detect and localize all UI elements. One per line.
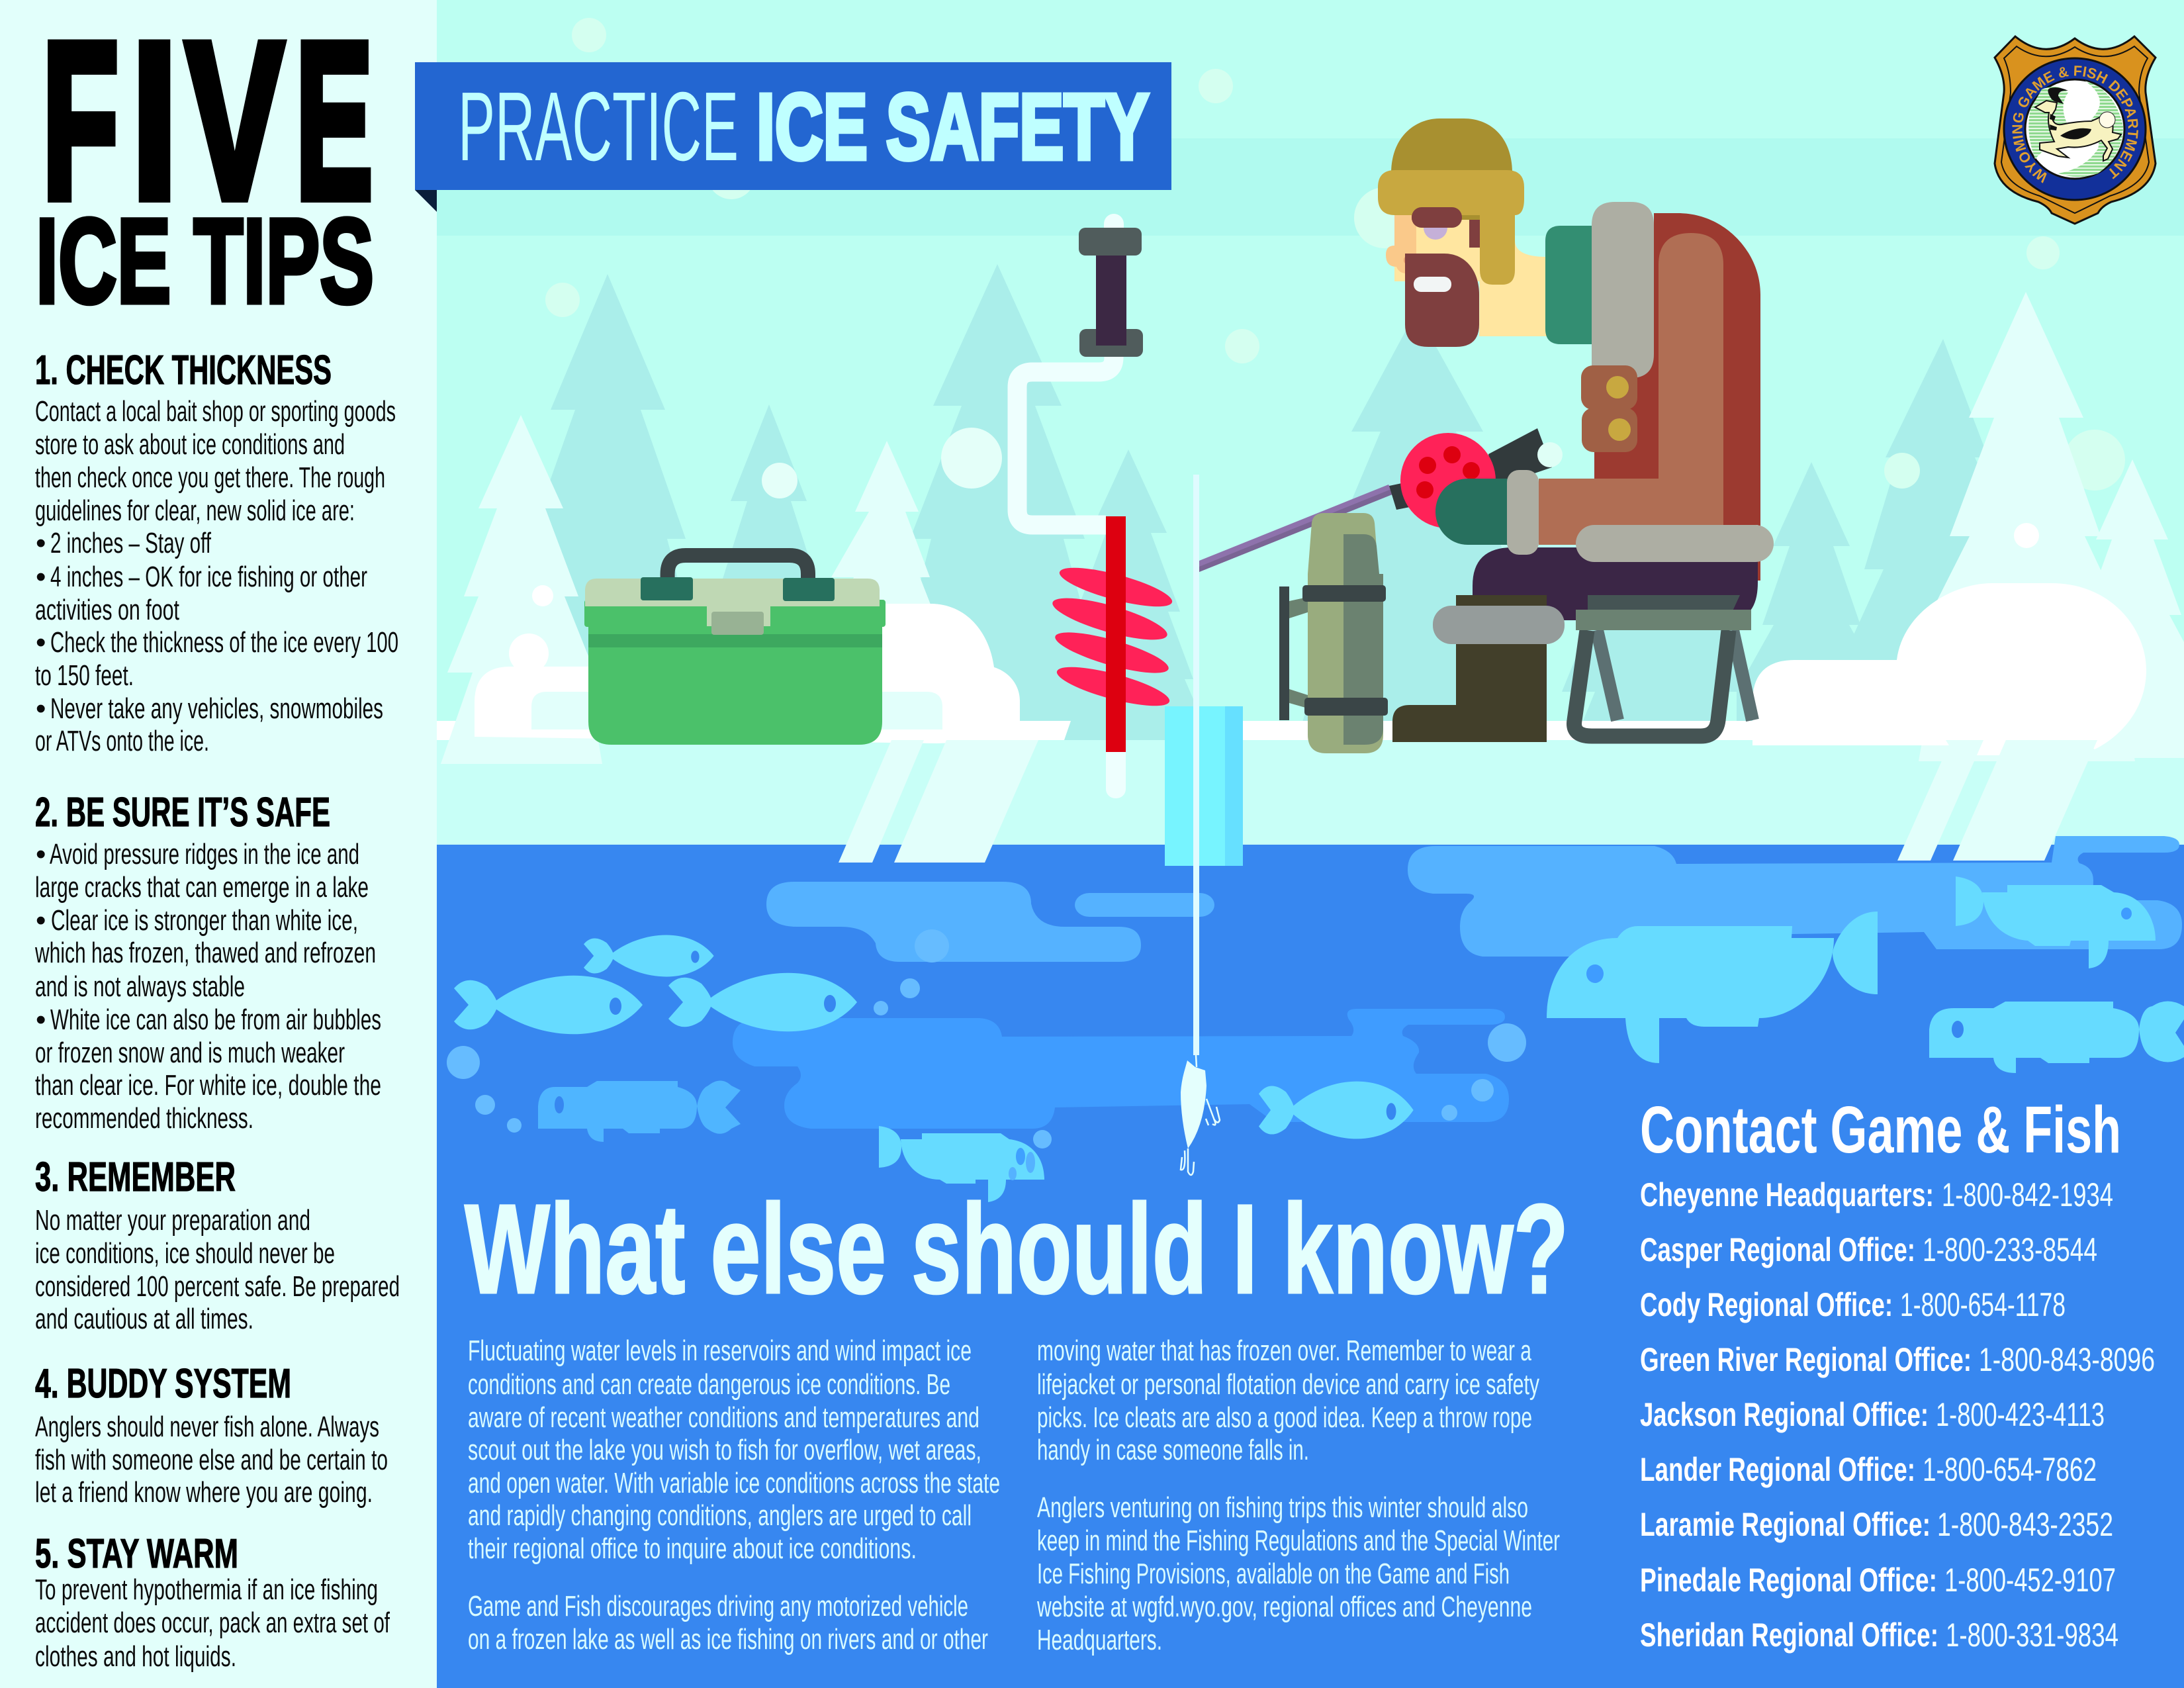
article column 1: and rapidly changing conditions, anglers are urged to call (468, 1499, 972, 1532)
contact list: 1-800-423-4113 (1936, 1396, 2105, 1433)
fish: small top (584, 935, 714, 976)
tip 1: 2 inches – Stay off (50, 527, 212, 559)
contact list: Pinedale Regional Office: (1640, 1562, 1937, 1599)
article column 2: lifejacket or personal flotation device and carry ice safety (1037, 1368, 1539, 1401)
contact list: 1-800-654-1178 (1900, 1286, 2066, 1323)
tip 2: than clear ice. For white ice, double the (35, 1069, 381, 1102)
tip 5: To prevent hypothermia if an ice fishing (35, 1573, 378, 1606)
contact list: Sheridan Regional Office: (1640, 1617, 1938, 1654)
tip 1: Check the thickness of the ice every 100 (50, 626, 398, 659)
title: five: V (186, 0, 284, 244)
tip 2: Avoid pressure ridges in the ice and (50, 838, 359, 870)
tip 2: Clear ice is stronger than white ice, (51, 904, 358, 937)
snowballs in the sky (545, 18, 2125, 498)
ice hole (1165, 706, 1243, 866)
tip 5: 5. STAY WARM (35, 1531, 238, 1577)
title: five: E (296, 0, 373, 244)
contact list: 1-800-452-9107 (1944, 1562, 2116, 1599)
lure with hooks (1181, 1055, 1220, 1175)
beard (1405, 254, 1479, 347)
hat brim and ear flap (1378, 170, 1524, 285)
tip 3: No matter your preparation and (35, 1204, 310, 1237)
eyebrow (1412, 207, 1462, 228)
article column 2: picks. Ice cleats are also a good idea. Keep a throw rope (1037, 1401, 1532, 1434)
snow drifts (475, 523, 2146, 755)
tip 1: • (36, 561, 46, 593)
tip 1: store to ask about ice conditions and (35, 428, 345, 461)
stool (1574, 630, 1752, 736)
article column 1: and open water. With variable ice conditions across the state (468, 1467, 1000, 1499)
tip 2: and is not always stable (35, 970, 245, 1003)
pants (1473, 547, 1758, 620)
tip 2: • (36, 1004, 46, 1036)
mouth (1414, 277, 1451, 292)
tip 2: which has frozen, thawed and refrozen (34, 937, 376, 969)
tip 4: Anglers should never fish alone. Always (35, 1411, 379, 1443)
tip 3 (35, 1154, 400, 1335)
contact list (1640, 1093, 2155, 1654)
tip 1: 4 inches – OK for ice fishing or other (50, 561, 367, 593)
article column 2: website at wgfd.wyo.gov, regional offices and Cheyenne (1036, 1591, 1532, 1623)
article column 2: moving water that has frozen over. Remember to wear a (1037, 1335, 1531, 1367)
contact list: Laramie Regional Office: (1640, 1506, 1931, 1543)
contact list: Cheyenne Headquarters: (1640, 1176, 1934, 1213)
tip 1: or ATVs onto the ice. (35, 725, 209, 757)
article column 1: scout out the lake you wish to fish for overflow, wet areas, (468, 1434, 981, 1466)
fish: top right (1956, 876, 2156, 968)
contact list: 1-800-654-7862 (1923, 1451, 2097, 1488)
ice reflections (839, 740, 2097, 863)
fishing line (1193, 475, 1199, 1055)
tip 1: • (36, 692, 46, 725)
jacket panel and arm (1539, 233, 1723, 545)
fishing rod (1199, 485, 1394, 572)
tip 4: fish with someone else and be certain to (35, 1444, 388, 1476)
reel (1400, 433, 1496, 528)
article column 2: keep in mind the Fishing Regulations and the Special Winter (1037, 1524, 1560, 1557)
tip 3: and cautious at all times. (35, 1303, 253, 1335)
article column 1: their regional office to inquire about ice conditions. (468, 1532, 917, 1565)
foreground trees (441, 292, 2184, 764)
tip 3: ice conditions, ice should never be (35, 1237, 335, 1270)
frozen lake surface (437, 721, 2184, 845)
article column 1: conditions and can create dangerous ice conditions. Be (468, 1368, 950, 1401)
tip 1: guidelines for clear, new solid ice are: (35, 494, 355, 527)
contact list: 1-800-843-2352 (1937, 1506, 2113, 1543)
tip 1: to 150 feet. (35, 659, 134, 692)
collar (1545, 226, 1594, 344)
boot (1392, 595, 1547, 742)
back of jacket (1539, 213, 1760, 581)
tip 4: 4. BUDDY SYSTEM (35, 1361, 291, 1407)
tip 2: • (36, 904, 46, 937)
tip 2: • (36, 838, 46, 870)
banner: practice ice safety (415, 62, 1171, 212)
article column 2: Anglers venturing on fishing trips this winter should also (1037, 1491, 1528, 1524)
tip 1: Contact a local bait shop or sporting goods (35, 395, 396, 428)
left panel (0, 0, 437, 1688)
fish: middle (668, 973, 857, 1031)
tip 3: 3. REMEMBER (35, 1154, 236, 1200)
tip 1: 1. CHECK THICKNESS (35, 348, 332, 393)
underwater light clouds (733, 836, 2182, 1129)
contact list: Lander Regional Office: (1640, 1451, 1915, 1488)
tip 1: • (36, 626, 46, 659)
tip 2: White ice can also be from air bubbles (50, 1004, 381, 1036)
tip 2: 2. BE SURE IT’S SAFE (35, 790, 330, 835)
contact list: Casper Regional Office: (1640, 1231, 1915, 1268)
face (1394, 215, 1482, 281)
logo: Wyoming Game and Fish badge: WYOMING GAME & FISH DEPARTMENT (2012, 66, 2138, 183)
article column 2: Ice Fishing Provisions, available on the Game and Fish (1037, 1558, 1510, 1590)
boot cuff (1433, 606, 1565, 644)
shoulder (1592, 202, 1654, 378)
rod handle (1488, 428, 1552, 487)
tip 4 (35, 1361, 388, 1509)
fish: left (454, 976, 643, 1034)
fish: center bottom (879, 1126, 1044, 1202)
article column 2: Headquarters. (1037, 1624, 1162, 1656)
banner: practice ice safety: ICE SAFETY (756, 74, 1149, 179)
nose (1386, 215, 1416, 273)
tip 4: let a friend know where you are going. (35, 1476, 373, 1509)
article column 1: on a frozen lake as well as ice fishing on rivers and or other (468, 1623, 988, 1656)
title: five: I (132, 0, 177, 244)
article column 1: Game and Fish discourages driving any motorized vehicle (468, 1590, 968, 1622)
sky background (437, 0, 2184, 845)
water (437, 845, 2184, 1688)
logo: Wyoming Game and Fish badge (1993, 35, 2157, 225)
tip 1: • (36, 527, 46, 559)
bait bag (1279, 513, 1388, 753)
fish: dull left (538, 1080, 741, 1142)
stool seat (1576, 595, 1751, 630)
tip 5 (35, 1531, 390, 1673)
cuff (1507, 470, 1539, 555)
tip 2: large cracks that can emerge in a lake (35, 871, 369, 904)
lap fold (1576, 525, 1774, 562)
contact list: 1-800-233-8544 (1923, 1231, 2097, 1268)
background trees (496, 264, 2058, 740)
tip 1 (35, 348, 398, 757)
sideburn (1469, 219, 1480, 248)
heading: what else should I know: What else should I know? (465, 1178, 1569, 1320)
article column 1: aware of recent weather conditions and temperatures and (468, 1401, 979, 1434)
title: five: F (42, 0, 118, 244)
bubbles (447, 978, 1526, 1149)
article column 2: handy in case someone falls in. (1037, 1434, 1309, 1466)
title: ice tips: ICE TIPS (36, 193, 374, 328)
tip 1: Never take any vehicles, snowmobiles (50, 692, 383, 725)
contact list: Jackson Regional Office: (1640, 1396, 1929, 1433)
contact list: Green River Regional Office: (1640, 1341, 1972, 1378)
ice auger (1017, 214, 1175, 798)
fish: lower right (1929, 1001, 2184, 1073)
fish: near the lure (1259, 1082, 1414, 1139)
tip 2: or frozen snow and is much weaker (35, 1037, 345, 1069)
contact list: Cody Regional Office: (1640, 1286, 1893, 1323)
tip 5: clothes and hot liquids. (35, 1640, 236, 1673)
tip 1: then check once you get there. The rough (35, 461, 385, 494)
banner: practice ice safety: PRACTICE (458, 72, 739, 181)
article column 1: Fluctuating water levels in reservoirs and wind impact ice (468, 1335, 972, 1367)
angler (1378, 118, 1774, 742)
contact list: 1-800-331-9834 (1946, 1617, 2118, 1654)
article column 2 (1036, 1335, 1560, 1656)
eye (1424, 216, 1447, 240)
elbow patches with buttons (1581, 365, 1637, 410)
contact list: 1-800-842-1934 (1942, 1176, 2113, 1213)
tip 2 (34, 790, 381, 1135)
tip 3: considered 100 percent safe. Be prepared (35, 1270, 400, 1303)
mitten (1435, 479, 1512, 545)
hat crown (1391, 118, 1512, 173)
tackle box (584, 555, 886, 745)
article column 1 (468, 1335, 1000, 1656)
tip 2: recommended thickness. (35, 1102, 253, 1135)
tip 1: activities on foot (35, 594, 179, 626)
neck (1479, 241, 1547, 336)
fish: big right (1547, 912, 1878, 1063)
tip 5: accident does occur, pack an extra set of (35, 1607, 390, 1639)
